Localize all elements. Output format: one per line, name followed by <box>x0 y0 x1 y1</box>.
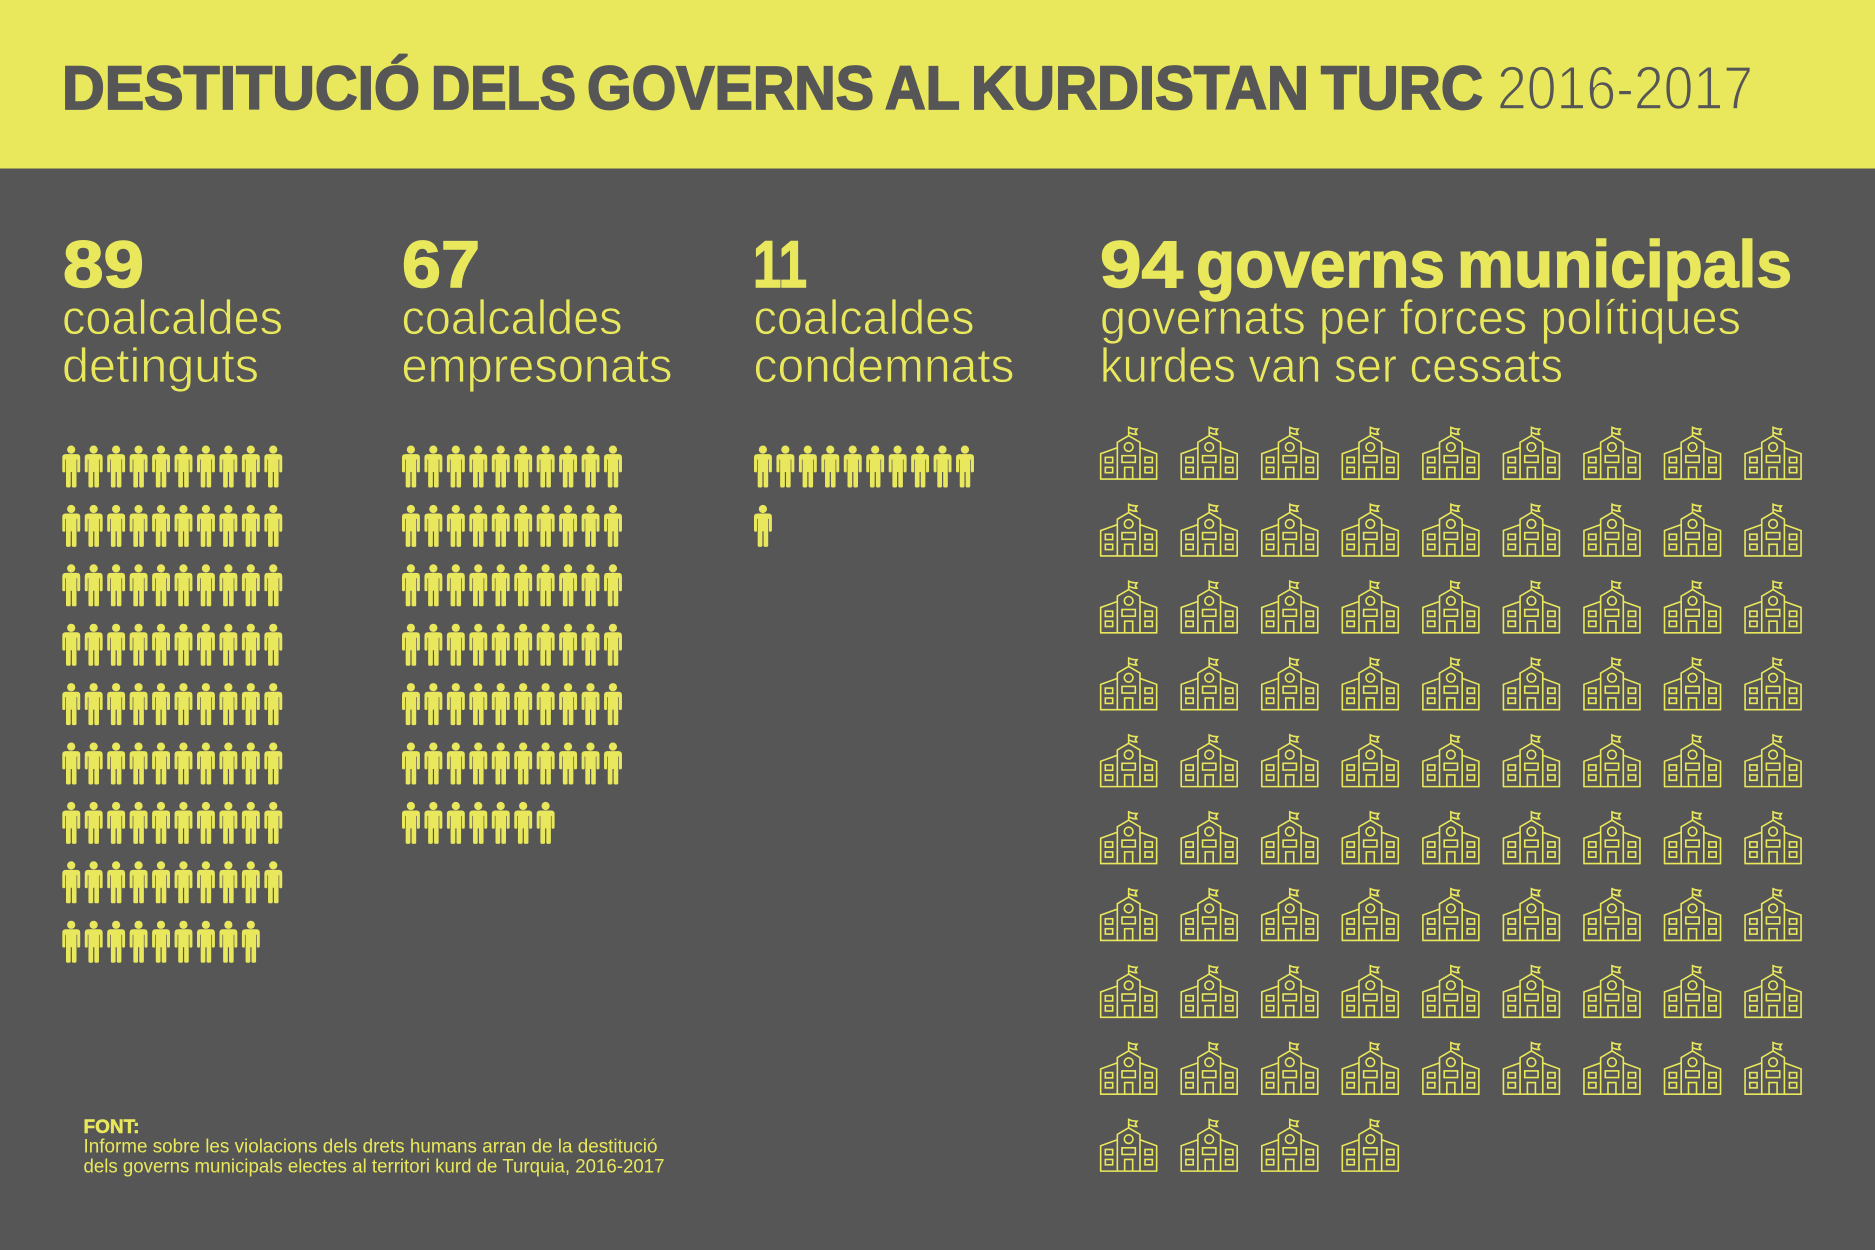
title: GOVERNS <box>587 54 874 122</box>
heading: 67: 67 <box>402 227 480 301</box>
text: coalcaldes empresonats <box>402 292 672 393</box>
pictogram: 94 town halls <box>1100 427 1802 1171</box>
text: governats per forces polítiques kurdes van ser cessats: kurdes van ser cessats <box>1100 340 1563 393</box>
source note: FONT: <box>84 1117 140 1138</box>
heading: 94 governs municipals <box>1100 227 1792 301</box>
source note <box>84 1117 664 1178</box>
heading: 94 governs municipals: municipals <box>1457 227 1792 301</box>
pictogram: 11 people <box>754 446 974 547</box>
heading: 94 governs municipals: governs <box>1196 227 1445 301</box>
text: coalcaldes condemnats <box>754 292 1014 393</box>
heading: 11: 11 <box>753 227 807 301</box>
heading: 94 governs municipals: 94 <box>1100 227 1183 301</box>
panel: 89 detained co-mayors <box>62 227 283 963</box>
title: KURDISTAN <box>971 54 1309 122</box>
heading: 89: 89 <box>63 227 144 301</box>
text: coalcaldes detinguts: coalcaldes <box>62 292 283 345</box>
text: governats per forces polítiques kurdes van ser cessats: governats per forces polítiques <box>1100 292 1741 345</box>
pictogram: 89 people <box>62 446 282 963</box>
panel: 11 convicted co-mayors <box>753 227 1014 547</box>
text: governats per forces polítiques kurdes van ser cessats <box>1100 292 1741 393</box>
text: coalcaldes condemnats: coalcaldes <box>754 292 974 345</box>
source note: dels governs municipals electes al territori kurd de Turquia, 2016-2017 <box>84 1156 664 1178</box>
source note: Informe sobre les violacions dels drets humans arran de la destitució <box>84 1136 658 1158</box>
title years: 2016-2017 <box>1497 54 1753 122</box>
title: DESTITUCIÓ <box>62 54 420 122</box>
pictogram: 67 people <box>402 446 622 844</box>
panel: 94 municipal governments <box>1100 227 1802 1171</box>
panel: 67 imprisoned co-mayors <box>402 227 672 844</box>
title: DELS <box>431 54 576 122</box>
text: coalcaldes condemnats: condemnats <box>754 340 1014 393</box>
text: coalcaldes empresonats: coalcaldes <box>402 292 622 345</box>
text: coalcaldes detinguts: detinguts <box>62 340 259 393</box>
title: AL <box>885 54 960 122</box>
text: coalcaldes empresonats: empresonats <box>402 340 672 393</box>
title <box>62 54 1753 122</box>
header band <box>0 0 1875 168</box>
text: coalcaldes detinguts <box>62 292 283 393</box>
title: TURC <box>1321 54 1483 122</box>
